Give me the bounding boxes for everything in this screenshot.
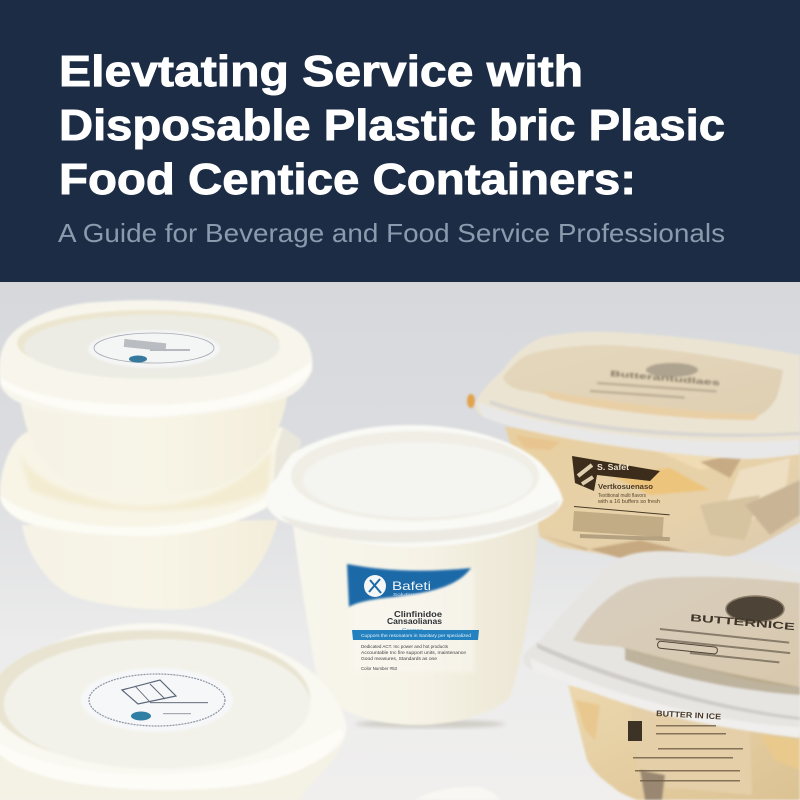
title: Elevtating Service with: [59, 47, 583, 96]
label heading: Clinfinidoe: [394, 610, 443, 619]
label stripe: [352, 630, 479, 640]
box lid label: Butterantudlaes: [610, 369, 721, 388]
cup label: Solutions: [393, 592, 420, 597]
box food label: Vertkosuenaso: [598, 484, 653, 491]
cup label: Cansaolianas: [387, 617, 443, 626]
container: clear box with food, top right: [467, 332, 800, 560]
sticker: front lid: [81, 668, 233, 732]
container: stacked bowls, top left: [0, 300, 312, 610]
cup label: Coenne: [402, 628, 423, 634]
box food label: [572, 456, 670, 541]
cup label: [347, 564, 479, 672]
cup label: Color Number #53: [361, 666, 397, 671]
upper bowl: [0, 300, 312, 496]
box food label: [628, 709, 743, 782]
box lid label: [656, 596, 796, 663]
box food label: S. Safet: [597, 463, 629, 472]
sticker: upper bowl lid: [88, 330, 220, 368]
box lid label: BUTTERNICE: [690, 613, 796, 633]
cup lid: [265, 425, 563, 547]
box body with food: [467, 394, 800, 560]
container: front round lid, bottom left: [0, 623, 347, 800]
title: Food Centice Containers:: [59, 155, 636, 204]
cup label: Good measures, Standards as one: [361, 656, 437, 661]
label logo: [364, 575, 386, 597]
small white container edge, bottom centre: [415, 787, 500, 800]
box food label: BUTTER IN ICE: [656, 709, 722, 721]
lower bowl: [0, 427, 301, 610]
box food label: Textitional multi flavors: [598, 493, 646, 499]
header band: [0, 0, 800, 282]
container: centre cup with lid: [265, 425, 563, 728]
cup body: [293, 520, 538, 725]
label brand: Bafeti: [392, 579, 431, 593]
title: [59, 47, 725, 204]
photo background: [0, 282, 800, 800]
subtitle: A Guide for Beverage and Food Service Professionals: [58, 218, 725, 248]
label banner: [347, 564, 471, 607]
cup shadow: [355, 720, 505, 728]
box body with food: [568, 685, 800, 800]
title: Disposable Plastic bric Plasic: [59, 101, 725, 150]
label body text: Dedicated ACT. Inc power and hot products: [361, 644, 449, 649]
label paper: [352, 570, 474, 672]
box lid label: [590, 363, 721, 399]
box lid: [523, 551, 800, 738]
box lid: [475, 332, 800, 459]
cup label: Cuppors the resonators in Sanitary per specialized: [361, 633, 471, 638]
cup label: Accountable Inc fire support units, maintenance: [361, 650, 466, 655]
container: clear box with food, bottom right: [523, 551, 800, 800]
box food label: with a 16 buffers so fresh: [597, 499, 660, 505]
